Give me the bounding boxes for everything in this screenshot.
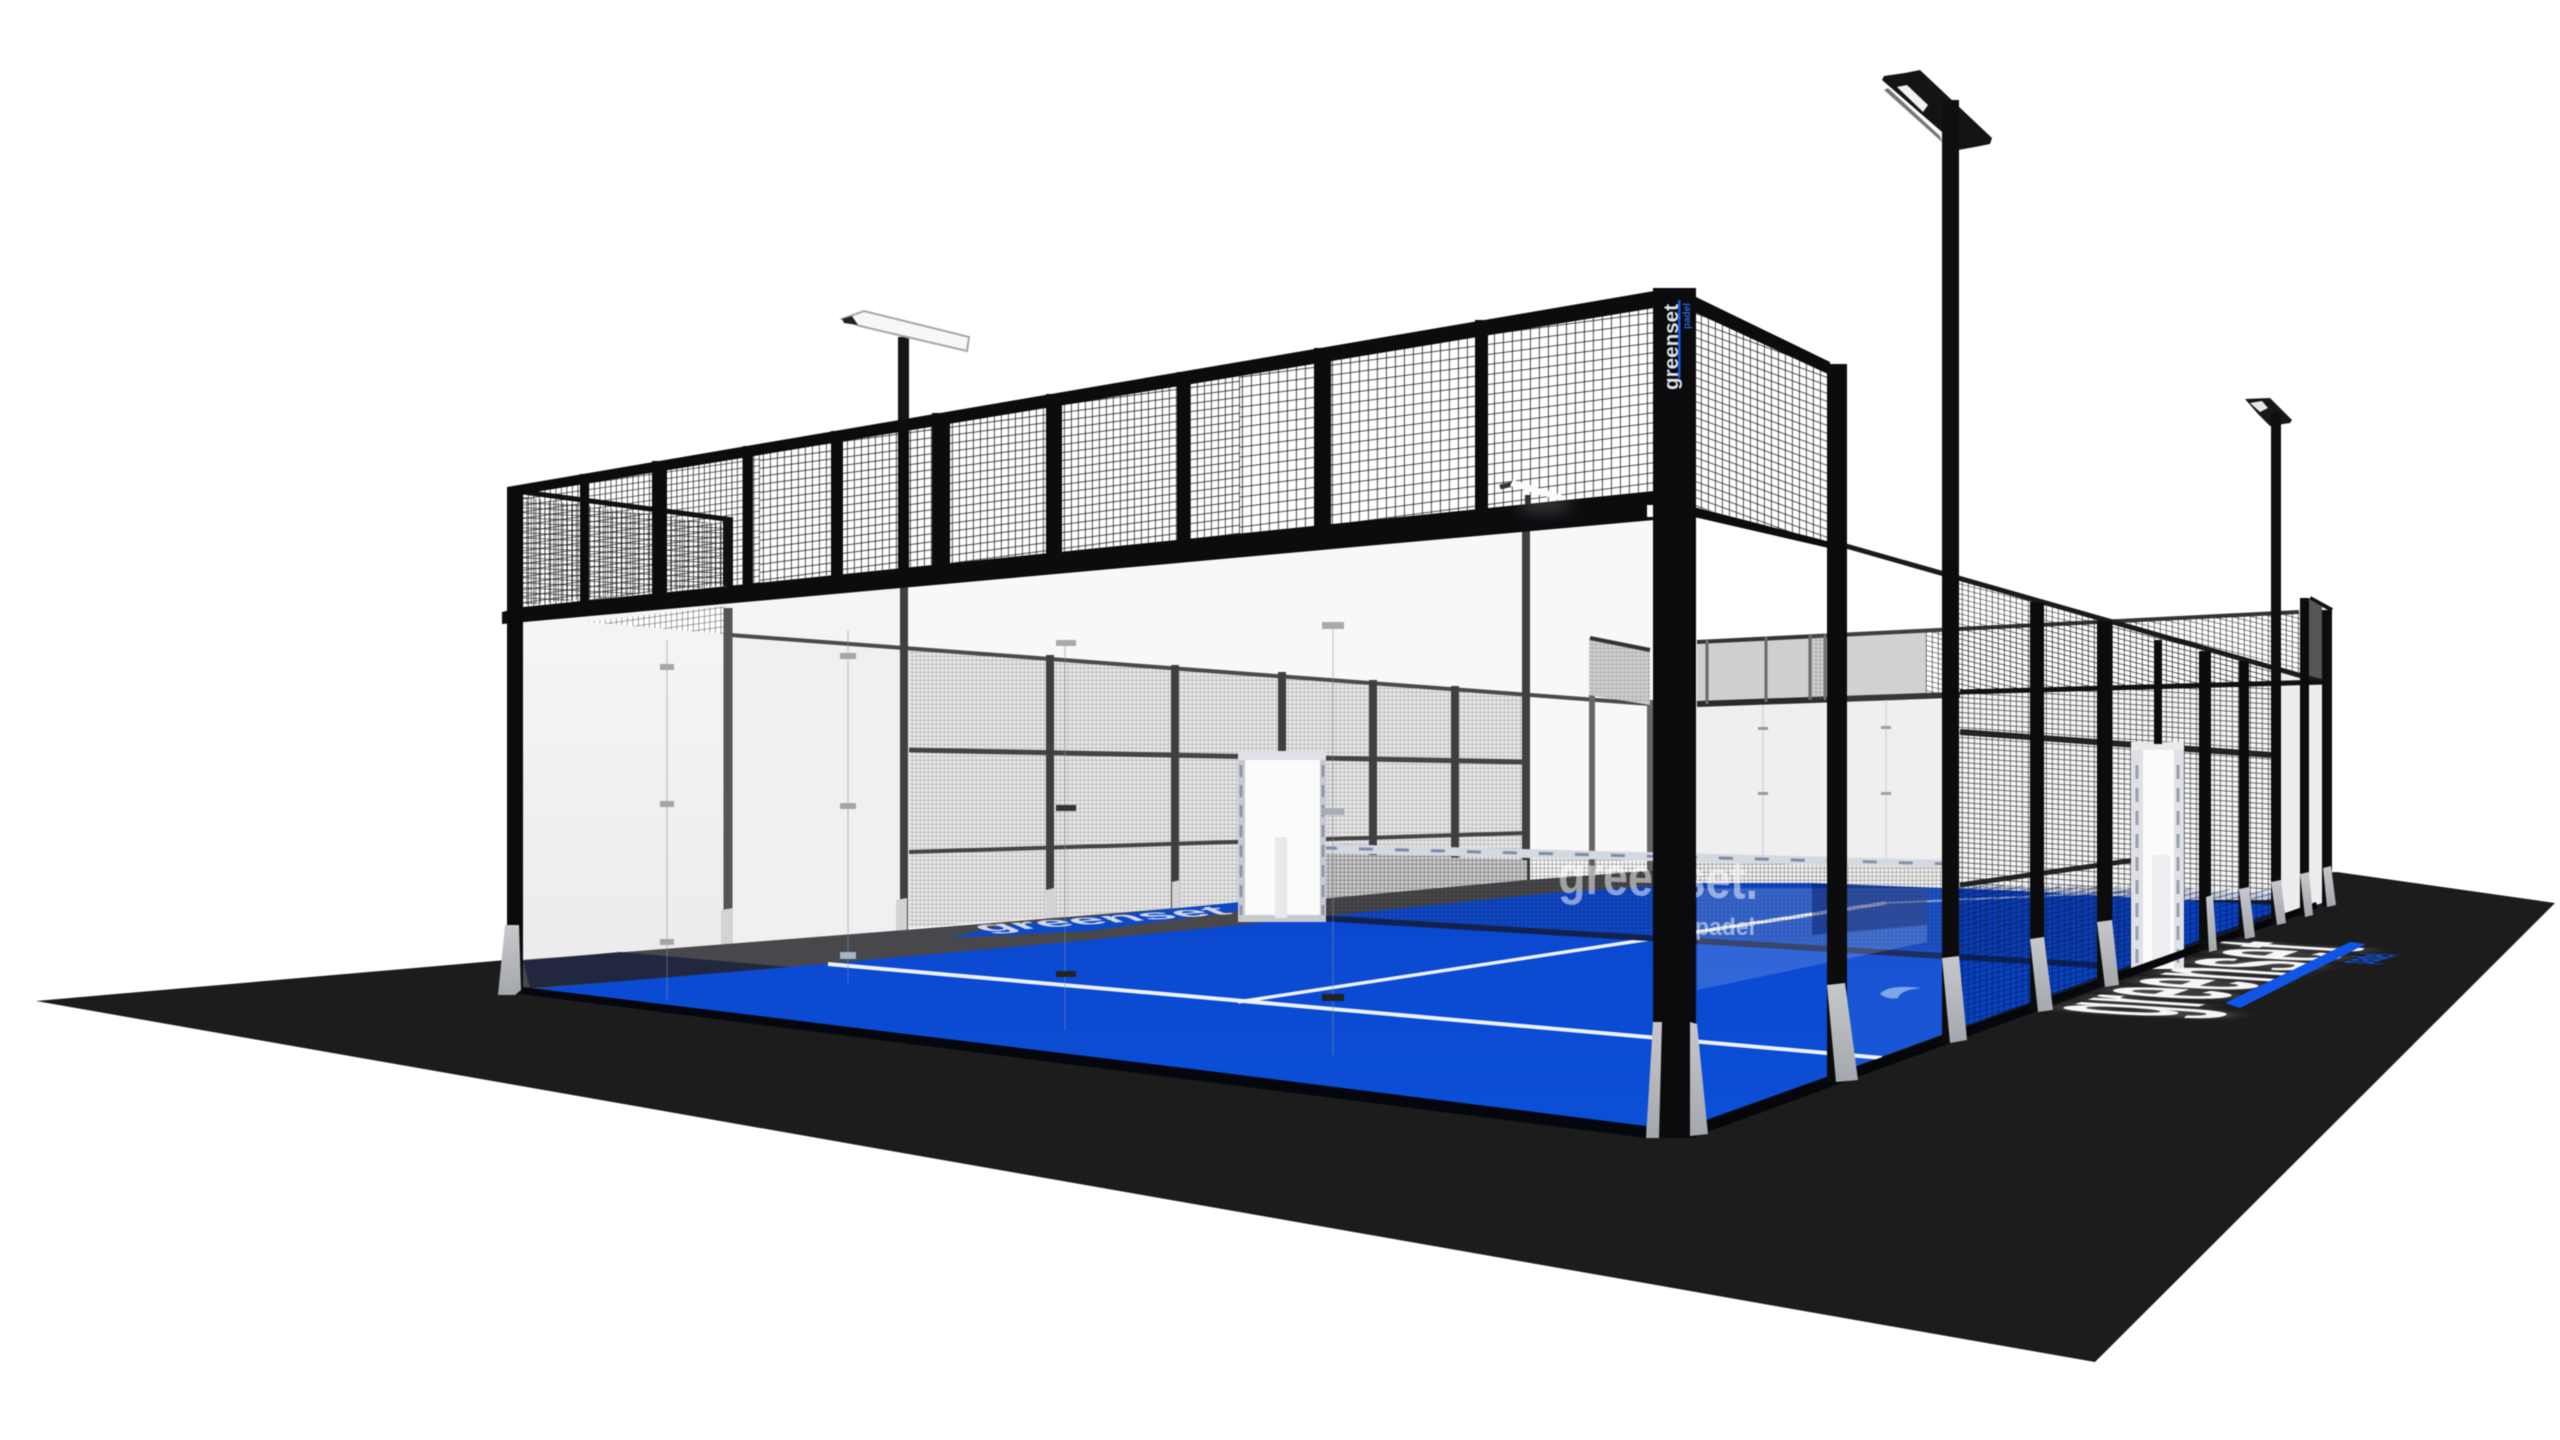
floor edge right bbox=[1695, 902, 2318, 1133]
far padel door bbox=[1238, 751, 1326, 922]
far surround logo: greenset bbox=[961, 904, 1241, 935]
right side wall mesh bbox=[1846, 546, 2332, 1073]
corner post logo greenset: greenset bbox=[1661, 304, 1683, 390]
panel behind net bbox=[1287, 852, 1527, 902]
left net post bbox=[1275, 837, 1287, 918]
right side posts bbox=[1827, 364, 2332, 1082]
court white lines bbox=[828, 892, 2130, 1058]
glass joints on front wall bbox=[660, 622, 1344, 1055]
far wall rails bbox=[730, 635, 1650, 704]
dark mesh through glass bbox=[1812, 883, 1927, 935]
light tower 2 bbox=[1882, 70, 1992, 580]
ground logo glow: greenset bbox=[1977, 936, 2411, 1021]
side mesh upper bbox=[1959, 578, 2271, 694]
inner light tower 2 head bbox=[1500, 480, 1562, 509]
far wall base plates bbox=[721, 908, 733, 970]
upper area behind front glass bbox=[905, 510, 1654, 930]
corner post logo underline bbox=[1678, 300, 1680, 378]
lamp glow on beam bbox=[1519, 497, 1571, 513]
far wall posts bbox=[904, 520, 1526, 944]
side mesh lower over floor bbox=[1959, 885, 2271, 1033]
thin side post bbox=[2154, 640, 2162, 744]
net bbox=[1287, 843, 2150, 962]
ghost reflection logo padel: padel bbox=[1695, 914, 1755, 941]
ground surface bbox=[36, 872, 2555, 1362]
net shadow on floor bbox=[1302, 917, 2110, 966]
corner post logo padel: padel bbox=[1682, 303, 1693, 329]
light tower 1 behind court bbox=[842, 311, 969, 447]
ground logo padel: padel bbox=[2323, 952, 2412, 965]
dark surround strip behind the court bbox=[523, 870, 1660, 990]
far end glass joints and clips bbox=[1763, 700, 1886, 860]
far end mesh band bbox=[1697, 612, 2324, 705]
left corner post bbox=[507, 488, 523, 994]
notch by corner post bbox=[1647, 505, 1653, 517]
front upper mesh band bbox=[523, 306, 1654, 607]
mesh seen through glass at top left bbox=[585, 606, 725, 634]
near padel door bbox=[2131, 742, 2184, 969]
base plates bbox=[498, 866, 2336, 1138]
side wall glass panels bbox=[1846, 546, 1959, 1073]
floor edge front bbox=[520, 987, 1646, 1138]
floor swoosh mark bbox=[1880, 987, 1921, 998]
translucent glass panel reflection bbox=[1697, 888, 1927, 990]
small far door panel mesh bbox=[1589, 638, 1650, 705]
far end wall behind the court bbox=[1696, 612, 2326, 900]
right upper mesh panel bbox=[1694, 296, 1846, 552]
blue playing floor bbox=[530, 883, 2318, 1130]
inner back-corner dense mesh bbox=[523, 497, 725, 605]
navy reflection near left corner bbox=[523, 952, 800, 988]
light tower 3 bbox=[2245, 398, 2292, 683]
left end wall glass bbox=[523, 580, 905, 960]
far end glass tint bbox=[1696, 700, 2326, 900]
ground logo blue bar bbox=[2225, 942, 2366, 1008]
far corner upper mesh bbox=[2309, 600, 2322, 684]
ground logo greenset: greenset bbox=[1977, 936, 2411, 1021]
main corner post bbox=[1653, 288, 1696, 1138]
band vertical posts bbox=[580, 474, 589, 604]
front lower beam bbox=[502, 491, 1654, 624]
ghost reflection logo greenset: greenset. bbox=[1558, 845, 1758, 911]
inner back-corner frame bbox=[523, 492, 733, 520]
right net post bbox=[2152, 855, 2170, 966]
side wall rails bbox=[1846, 546, 2330, 684]
side mesh middle bbox=[1959, 684, 2271, 890]
far long wall mesh bbox=[721, 520, 1650, 970]
front top rail bbox=[507, 290, 1660, 498]
